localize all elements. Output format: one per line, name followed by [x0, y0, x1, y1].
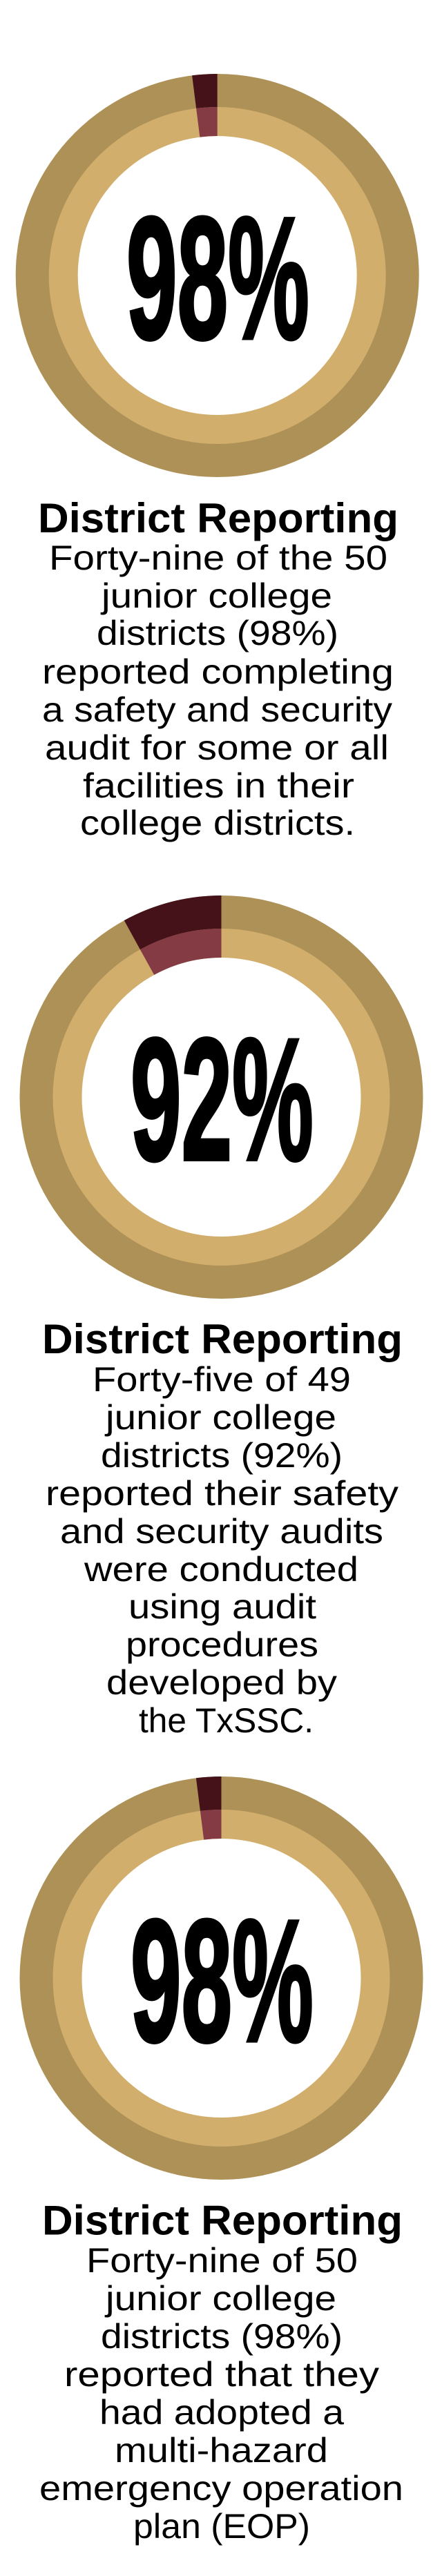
description text: junior college	[100, 577, 332, 615]
description text: Forty-nine of 50	[86, 2241, 358, 2280]
big number: 98%: 98%	[131, 1883, 314, 2078]
description text	[39, 2241, 403, 2546]
description text: reported their safety	[46, 1474, 398, 1513]
donut chart: 92%	[19, 895, 423, 1299]
description text: and security audits	[60, 1512, 383, 1551]
heading: District Reporting	[42, 1316, 403, 1362]
description text: plan (EOP)	[133, 2507, 310, 2546]
description text: multi-hazard	[115, 2431, 328, 2470]
description text: districts (92%)	[101, 1436, 343, 1475]
description text: college districts.	[80, 804, 355, 842]
description text: districts (98%)	[97, 614, 338, 652]
description text: reported that they	[64, 2355, 379, 2394]
big number: 98%: 98%	[126, 181, 309, 376]
description text: emergency operation	[39, 2469, 403, 2508]
panel: emergency operation plan 98%	[19, 1776, 423, 2546]
description text: Forty-nine of the 50	[49, 539, 387, 577]
description text	[42, 539, 394, 842]
description text: the TxSSC.	[139, 1701, 314, 1740]
description text: procedures	[126, 1625, 318, 1664]
description text: junior college	[104, 1398, 336, 1437]
panel: TxSSC audit procedures 92%	[19, 895, 423, 1740]
description text: junior college	[104, 2279, 336, 2318]
description text: Forty-five of 49	[93, 1360, 351, 1399]
description text: had adopted a	[99, 2393, 344, 2432]
description text	[46, 1360, 398, 1740]
description text: were conducted	[84, 1550, 358, 1589]
heading: District Reporting	[38, 495, 398, 541]
description text: reported completing	[42, 652, 394, 691]
description text: audit for some or all	[45, 728, 389, 767]
donut chart: 98%	[16, 74, 419, 477]
description text: using audit	[128, 1587, 316, 1626]
description text: facilities in their	[83, 766, 354, 805]
donut chart: 98%	[19, 1776, 423, 2180]
panel: audit completion 98%	[16, 74, 419, 842]
big number: 92%: 92%	[131, 1003, 314, 1197]
description text: a safety and security	[42, 690, 392, 729]
description text: developed by	[106, 1663, 337, 1702]
heading: District Reporting	[42, 2197, 403, 2244]
description text: districts (98%)	[101, 2317, 343, 2356]
